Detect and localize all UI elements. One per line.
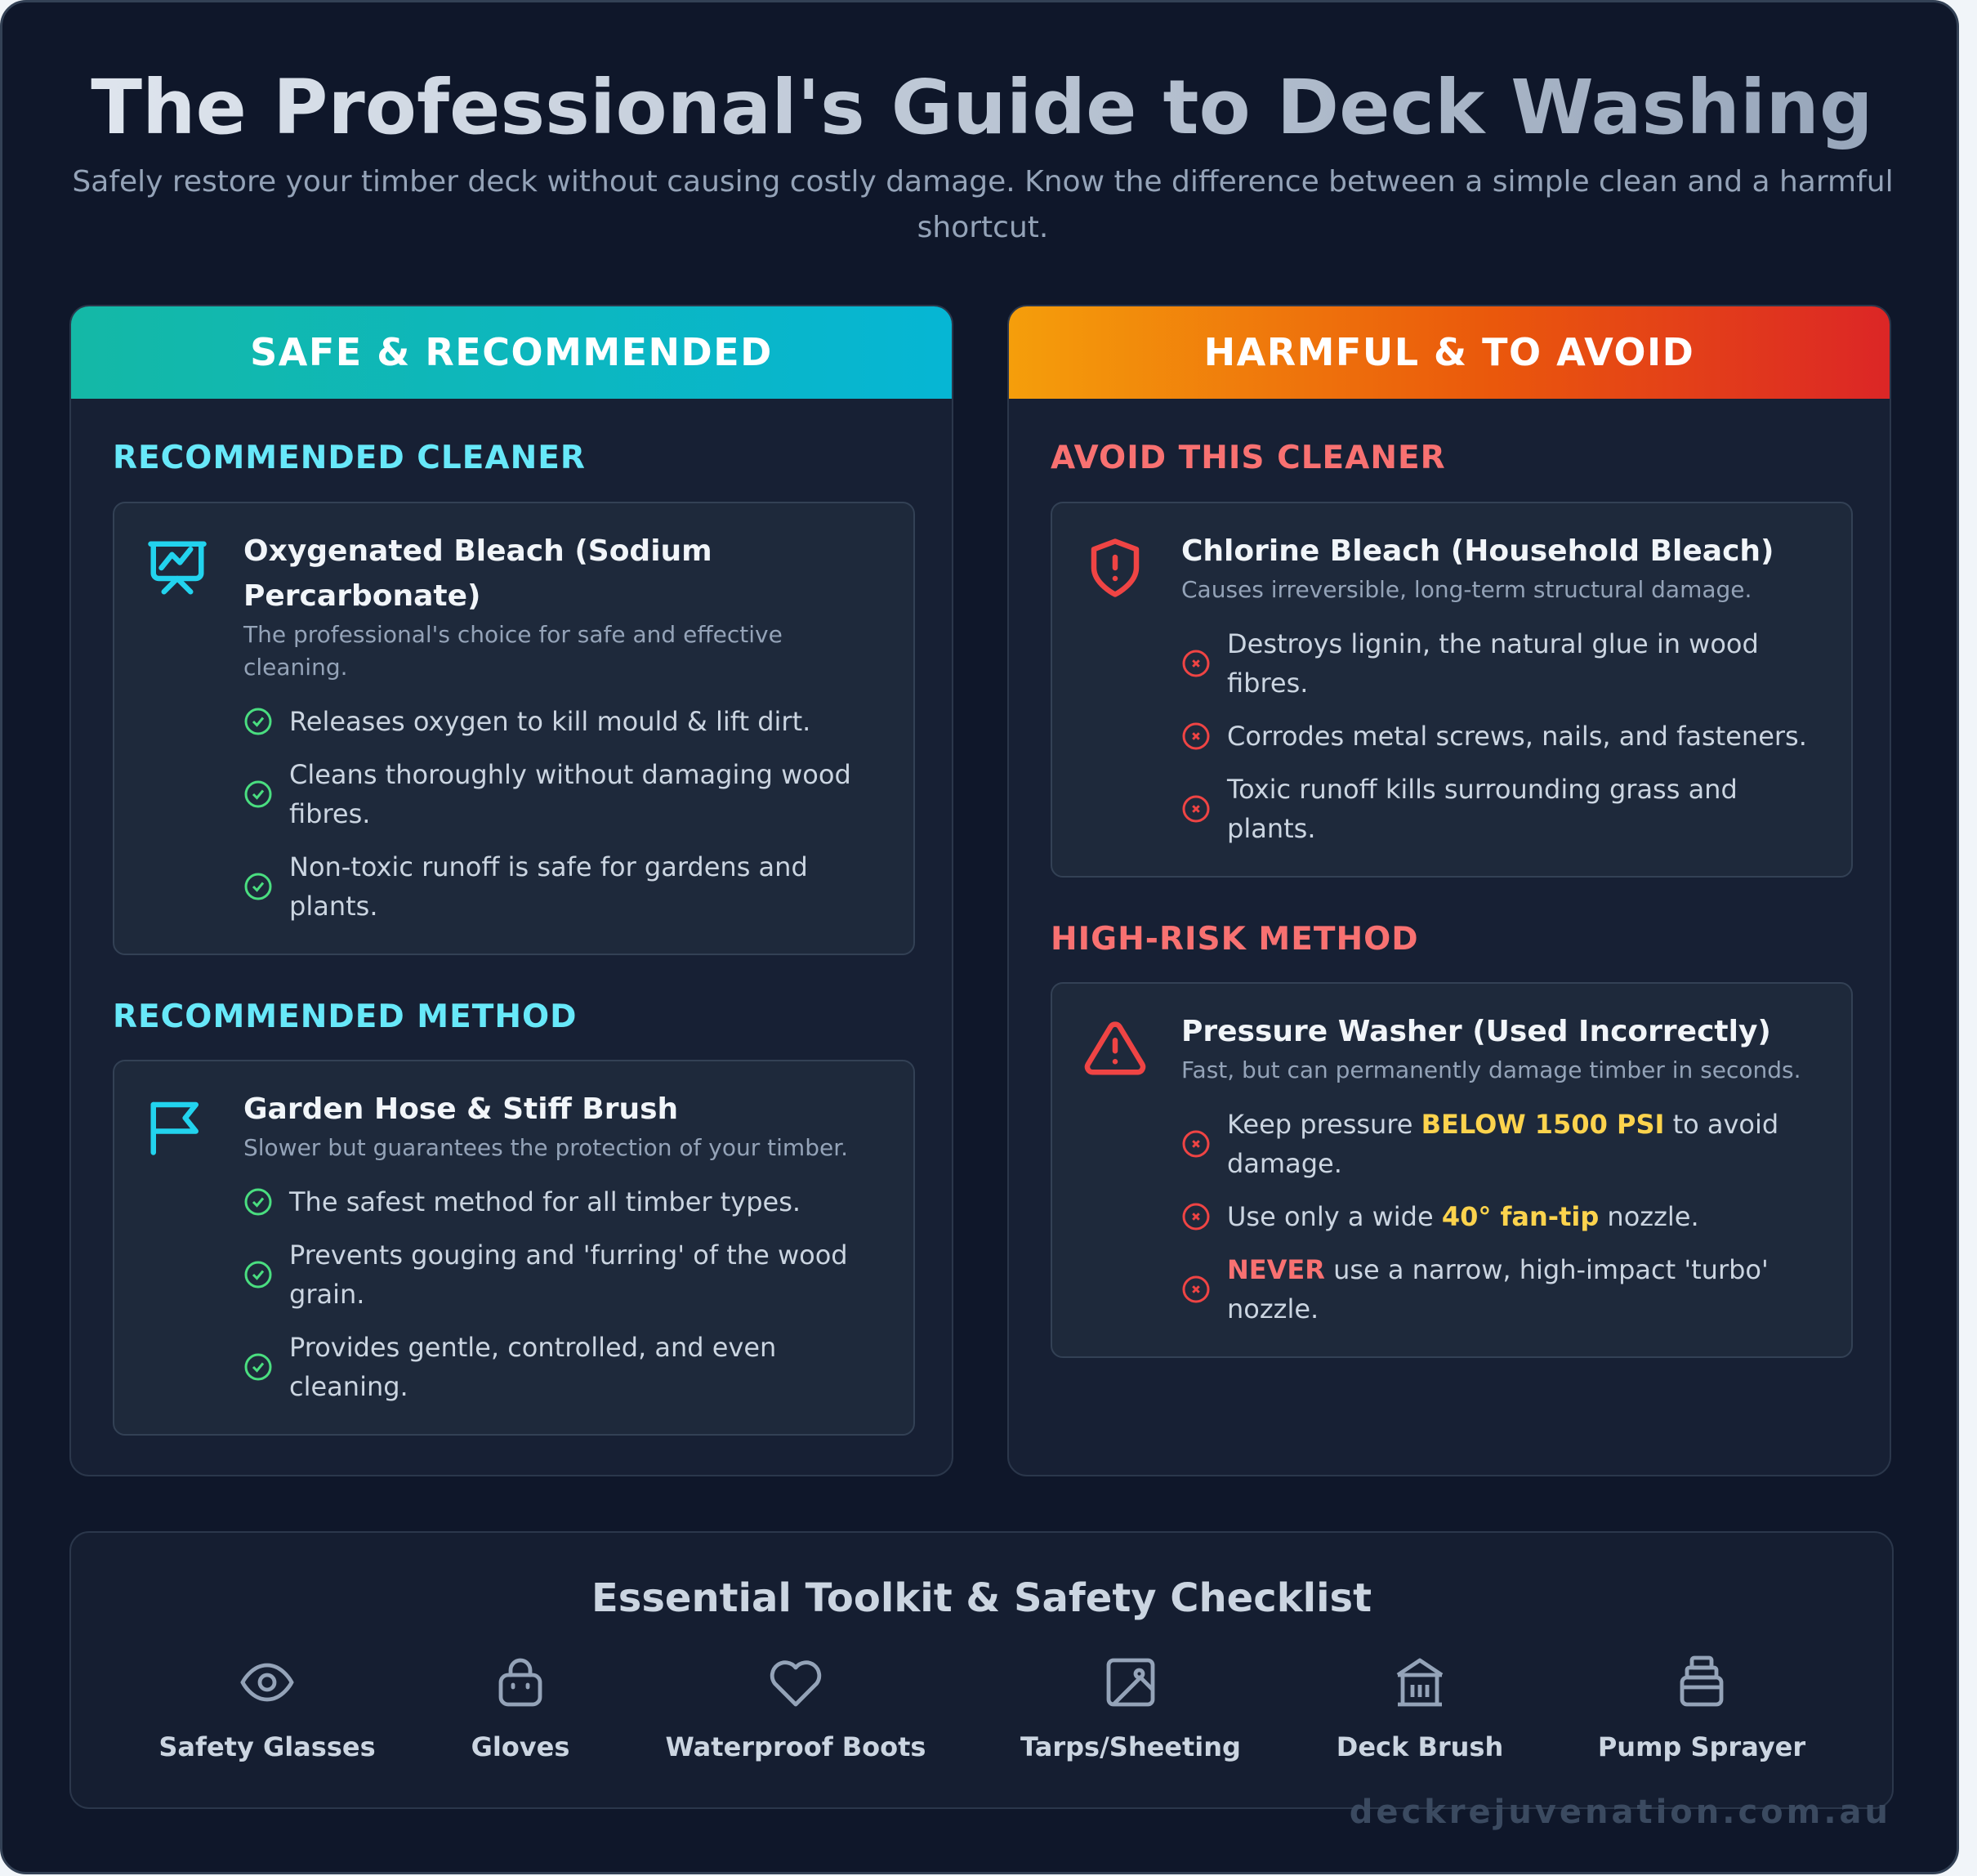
tool: safety glasses bbox=[158, 1664, 376, 1762]
tool: deck brush bbox=[1337, 1659, 1503, 1762]
heading: recommended cleaner: RECOMMENDED CLEANER bbox=[113, 440, 586, 476]
card: pressure washer bbox=[1051, 982, 1853, 1358]
card: oxygenated bleach: Releases oxygen to kill mould & lift dirt. bbox=[289, 706, 810, 737]
header: harmful: HARMFUL & TO AVOID bbox=[1204, 330, 1694, 374]
tool: waterproof boots: Waterproof Boots bbox=[666, 1731, 926, 1762]
card: chlorine bleach: Causes irreversible, long-term structural damage. bbox=[1181, 576, 1752, 603]
card: oxygenated bleach bbox=[113, 502, 915, 955]
card: oxygenated bleach: The professional's choice for safe and effective cleaning. bbox=[243, 621, 783, 681]
card: chlorine bleach: Toxic runoff kills surrounding grass and plants. bbox=[1227, 774, 1738, 844]
tool: pump sprayer bbox=[1598, 1655, 1805, 1762]
tool: tarps: Tarps/Sheeting bbox=[1020, 1731, 1241, 1762]
tool: gloves bbox=[471, 1659, 569, 1762]
tool: pump sprayer: Pump Sprayer bbox=[1598, 1731, 1805, 1762]
panel: safe & recommended bbox=[69, 305, 953, 1476]
card: garden hose bbox=[113, 1060, 915, 1436]
card: garden hose: Garden Hose & Stiff Brush bbox=[243, 1092, 678, 1126]
header: safe bbox=[71, 306, 952, 399]
card: pressure washer: Fast, but can permanently damage timber in seconds. bbox=[1181, 1056, 1801, 1083]
heading: high-risk method: HIGH-RISK METHOD bbox=[1051, 921, 1419, 958]
icon: presentation chart bbox=[148, 541, 207, 595]
tool: deck brush: Deck Brush bbox=[1337, 1731, 1503, 1762]
card: pressure washer: Pressure Washer (Used Incorrectly) bbox=[1181, 1015, 1771, 1048]
card: chlorine bleach: Destroys lignin, the natural glue in wood fibres. bbox=[1227, 628, 1759, 699]
card: garden hose: Prevents gouging and 'furring' of the wood grain. bbox=[289, 1240, 848, 1310]
card: pressure washer: Keep pressure BELOW 1500 PSI to avoid damage. bbox=[1227, 1109, 1778, 1179]
icon: flag bbox=[150, 1101, 199, 1155]
panel: toolkit bbox=[69, 1531, 1894, 1809]
tool: tarps bbox=[1020, 1659, 1241, 1762]
title: The Professional's Guide to Deck Washing bbox=[91, 64, 1873, 151]
tool: gloves: Gloves bbox=[471, 1731, 569, 1762]
header: safe: SAFE & RECOMMENDED bbox=[250, 330, 773, 374]
card: chlorine bleach bbox=[1051, 502, 1853, 878]
card: garden hose: The safest method for all timber types. bbox=[289, 1186, 801, 1217]
card: oxygenated bleach: Non-toxic runoff is safe for gardens and plants. bbox=[289, 851, 808, 922]
watermark: deckrejuvenation.com.au bbox=[1350, 1793, 1891, 1831]
header: harmful bbox=[1009, 306, 1890, 399]
heading: recommended method: RECOMMENDED METHOD bbox=[113, 998, 578, 1035]
card: chlorine bleach: Corrodes metal screws, nails, and fasteners. bbox=[1227, 721, 1807, 752]
tool: safety glasses: Safety Glasses bbox=[158, 1731, 376, 1762]
card: pressure washer: NEVER use a narrow, high-impact 'turbo' nozzle. bbox=[1227, 1254, 1769, 1324]
card: chlorine bleach: Chlorine Bleach (Household Bleach) bbox=[1181, 534, 1774, 568]
panel: harmful & to avoid bbox=[1007, 305, 1891, 1476]
card: garden hose: Provides gentle, controlled, and even cleaning. bbox=[289, 1332, 776, 1402]
tool: waterproof boots bbox=[666, 1660, 926, 1762]
card: garden hose: Slower but guarantees the protection of your timber. bbox=[243, 1134, 848, 1161]
icon: warning triangle bbox=[1085, 1021, 1145, 1075]
icon: shield alert bbox=[1091, 538, 1139, 597]
heading: avoid this cleaner: AVOID THIS CLEANER bbox=[1051, 440, 1446, 476]
toolkit heading: Essential Toolkit & Safety Checklist bbox=[591, 1575, 1372, 1621]
card: pressure washer: Use only a wide 40° fan-tip nozzle. bbox=[1227, 1201, 1699, 1232]
card: oxygenated bleach: Oxygenated Bleach (Sodium Percarbonate) bbox=[243, 534, 712, 613]
subtitle: Safely restore your timber deck without causing costly damage. Know the difference between a simple clean and a harmful shortcut. bbox=[72, 165, 1894, 244]
card: oxygenated bleach: Cleans thoroughly without damaging wood fibres. bbox=[289, 759, 851, 829]
